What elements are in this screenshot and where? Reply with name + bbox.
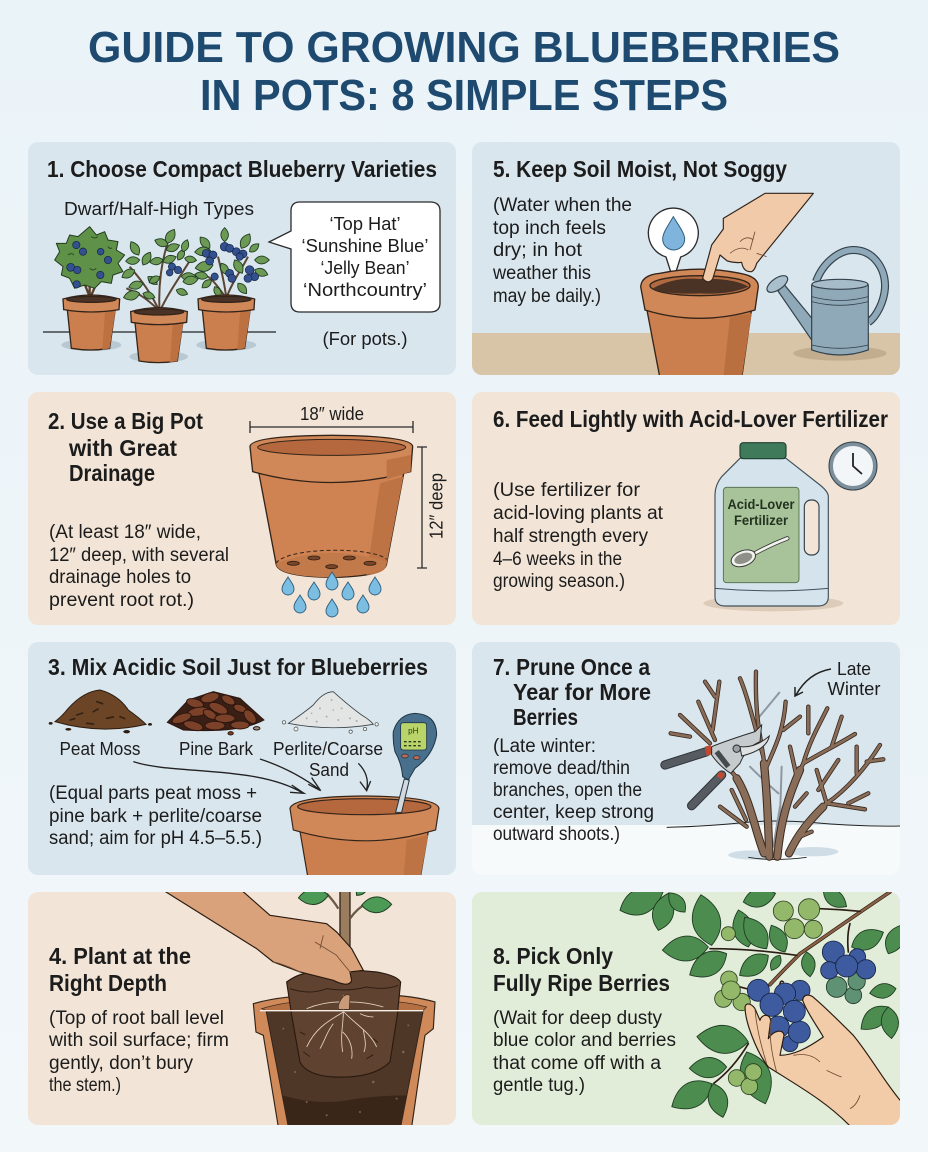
- text: pruning guidance: [493, 736, 654, 845]
- heading: step 2: Drainage: [69, 460, 155, 486]
- heading: step 2: [48, 408, 203, 486]
- note: for pots: (For pots.): [322, 328, 408, 349]
- heading: step 8: [493, 943, 670, 996]
- text: pruning guidance: center, keep strong: [493, 802, 654, 823]
- text: watering guidance: weather this: [492, 263, 591, 284]
- text: feeding guidance: half strength every: [493, 526, 648, 547]
- text: ripeness guidance: gentle tug.): [493, 1075, 585, 1096]
- drainage holes: [287, 556, 376, 569]
- text: watering guidance: may be daily.): [493, 286, 601, 307]
- heading: step 7: Year for More: [513, 679, 651, 705]
- text: watering guidance: (Water when the: [493, 195, 632, 216]
- label: late winter: Late: [837, 658, 871, 679]
- text: watering guidance: dry; in hot: [493, 240, 583, 261]
- heading: step 3: 3. Mix Acidic Soil Just for Blueberries: [48, 654, 428, 680]
- table surface: [472, 333, 900, 375]
- snowy ground: [472, 825, 900, 875]
- pot cross-section: [253, 994, 435, 1127]
- text: soil mix guidance: [49, 783, 262, 849]
- text: planting guidance: the stem.): [49, 1075, 121, 1096]
- heading: step 6: 6. Feed Lightly with Acid-Lover Fertilizer: [493, 406, 888, 432]
- text: pot size guidance: (At least 18″ wide,: [49, 522, 201, 543]
- text: ripeness guidance: blue color and berries: [493, 1030, 676, 1051]
- callout: variety list: [269, 202, 440, 312]
- heading: step 1: 1. Choose Compact Blueberry Varieties: [47, 156, 437, 182]
- heading: step 8: Fully Ripe Berries: [493, 970, 670, 996]
- text: soil mix guidance: sand; aim for pH 4.5–5.5.): [49, 828, 262, 849]
- root ball: [287, 970, 401, 1077]
- panel: step 7 pruning: [472, 642, 900, 875]
- text: feeding guidance: growing season.): [493, 571, 625, 592]
- heading: step 5: 5. Keep Soil Moist, Not Soggy: [493, 156, 787, 182]
- panel: step 8 picking: [472, 880, 909, 1126]
- text: planting guidance: [48, 1008, 229, 1096]
- text: watering guidance: [492, 195, 632, 307]
- text: watering guidance: top inch feels: [493, 218, 606, 239]
- heading: step 2: 2. Use a Big Pot: [48, 408, 203, 434]
- water drop bubble: [648, 208, 698, 280]
- text: pruning guidance: branches, open the: [493, 780, 642, 801]
- ingredient: perlite and sand: Perlite/Coarse: [273, 738, 383, 759]
- illustration: berry branch and hand: [615, 880, 909, 1126]
- ingredient: peat moss: [49, 690, 152, 759]
- text: pot size guidance: [49, 522, 229, 611]
- callout: variety list: ‘Jelly Bean’: [320, 257, 410, 278]
- heading: step 7: 7. Prune Once a: [493, 654, 650, 680]
- heading: step 2: with Great: [68, 435, 177, 461]
- dimension: depth: [417, 447, 446, 568]
- heading: step 4: [49, 943, 191, 996]
- pH meter: pH: [408, 726, 419, 735]
- panel: step 6 fertilizer: [472, 392, 900, 625]
- text: ripeness guidance: (Wait for deep dusty: [493, 1008, 662, 1029]
- water drops: [282, 572, 381, 617]
- watering can: [764, 250, 887, 361]
- panel: step 4 planting depth: [28, 880, 456, 1127]
- heading: step 7: [493, 654, 651, 730]
- panel: step 3 acidic soil: [28, 642, 456, 880]
- text: soil mix guidance: (Equal parts peat moss +: [49, 783, 257, 804]
- spoon: [729, 538, 787, 570]
- title: IN POTS: 8 SIMPLE STEPS: [200, 71, 728, 120]
- text: feeding guidance: (Use fertilizer for: [493, 480, 641, 501]
- callout: variety list: ‘Top Hat’: [330, 213, 400, 234]
- branches: [710, 892, 890, 1084]
- text: ripeness guidance: that come off with a: [493, 1053, 661, 1074]
- callout: variety list: ‘Northcountry’: [303, 279, 427, 300]
- plant: round bush in pot: [55, 227, 125, 351]
- ingredient: perlite and sand: [273, 692, 383, 780]
- title: GUIDE TO GROWING BLUEBERRIES: [88, 23, 840, 72]
- icon: clock: [829, 442, 877, 490]
- plant: berry-laden shrub in pot: [194, 228, 269, 351]
- text: pruning guidance: (Late winter:: [493, 736, 596, 757]
- label: late winter: Winter: [828, 678, 880, 699]
- dimension: width: 18″ wide: [300, 403, 364, 424]
- text: feeding guidance: 4–6 weeks in the: [493, 549, 622, 570]
- text: pruning guidance: outward shoots.): [493, 824, 620, 845]
- panel: step 2 big pot: [28, 392, 456, 625]
- ingredient: pine bark: Pine Bark: [179, 738, 254, 759]
- dimension: depth: 12″ deep: [426, 473, 446, 539]
- text: pot size guidance: drainage holes to: [49, 567, 191, 588]
- text: pot size guidance: prevent root rot.): [49, 590, 194, 611]
- fertilizer jug: [703, 443, 843, 611]
- text: ripeness guidance: [493, 1008, 676, 1096]
- illustration: root ball in pot: [163, 880, 435, 1127]
- text: feeding guidance: [493, 480, 664, 592]
- heading: step 8: 8. Pick Only: [493, 943, 613, 969]
- heading: step 4: 4. Plant at the: [49, 943, 191, 969]
- text: pruning guidance: remove dead/thin: [493, 758, 630, 779]
- illustration: pruned bush and loppers: [665, 672, 900, 860]
- text: planting guidance: (Top of root ball level: [49, 1008, 224, 1029]
- dimension: width: [250, 403, 413, 433]
- text: pot size guidance: 12″ deep, with several: [49, 545, 229, 566]
- panel: step 5 soil moisture: [472, 142, 900, 378]
- soil line: [260, 1010, 424, 1012]
- hand testing soil: [703, 193, 813, 282]
- arrows into pot: [133, 759, 371, 793]
- ripe blue berries: [747, 941, 876, 1052]
- ground line: [43, 331, 276, 333]
- pot: [290, 796, 439, 880]
- green berries: [715, 899, 822, 1095]
- heading: step 7: Berries: [513, 704, 578, 730]
- label: late winter: [795, 658, 880, 699]
- jug label: Acid-Lover: [728, 496, 795, 512]
- callout: variety list: ‘Sunshine Blue’: [302, 235, 428, 256]
- heading: step 4: Right Depth: [49, 970, 167, 996]
- ripening berries: [826, 973, 865, 1004]
- picking hand: [745, 995, 902, 1126]
- jug label: Fertilizer: [734, 512, 789, 528]
- label: dwarf types: Dwarf/Half-High Types: [64, 198, 254, 219]
- loppers: [665, 725, 769, 806]
- title: [88, 23, 840, 120]
- seedling stem and leaves: [298, 892, 392, 947]
- plant: leafy shrub in pot: [120, 227, 199, 363]
- panel: step 1 compact varieties: [28, 142, 456, 375]
- roots: [307, 995, 383, 1059]
- terracotta pot: [641, 269, 758, 378]
- text: feeding guidance: acid-loving plants at: [493, 503, 664, 524]
- leaves: [615, 880, 909, 1120]
- hand: [163, 890, 363, 984]
- text: soil mix guidance: pine bark + perlite/coarse: [49, 806, 262, 827]
- ingredient: peat moss: Peat Moss: [60, 738, 140, 759]
- text: planting guidance: with soil surface; firm: [48, 1030, 229, 1051]
- pH meter: [393, 713, 437, 812]
- large terracotta pot: [250, 435, 413, 577]
- ingredient: perlite and sand: Sand: [309, 759, 349, 780]
- illustration: pot, hand, can: [641, 193, 887, 378]
- jug label: [728, 496, 795, 528]
- text: planting guidance: gently, don’t bury: [49, 1053, 193, 1074]
- ingredient: pine bark: [167, 691, 264, 759]
